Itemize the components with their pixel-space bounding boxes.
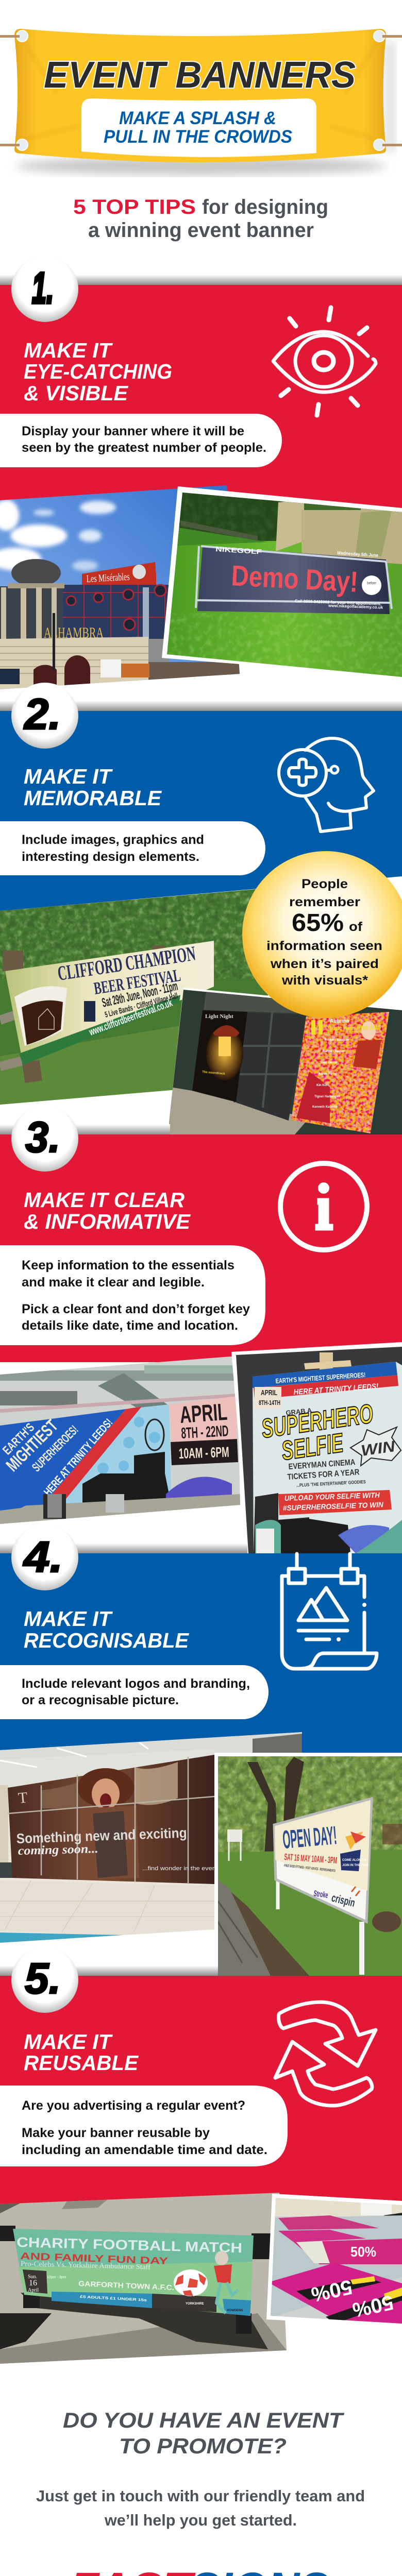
section 5 background [0, 1965, 402, 2205]
section 3 text pill: Keep information to the essentials [22, 1258, 234, 1273]
section 2 text pill: Include images, graphics and [22, 833, 204, 847]
section 1 heading: EYE-CATCHING [24, 360, 172, 383]
closing question [63, 2408, 345, 2458]
section 5 heading [24, 2030, 139, 2075]
photo: superhero selfie board: GRAB A [286, 1406, 312, 1417]
photo: Open Day banner [214, 1753, 402, 1976]
photo: Light Night posters: Aaron Parks [319, 1073, 337, 1076]
step badge 4 [11, 1524, 78, 1590]
section 5 heading: REUSABLE [24, 2051, 139, 2075]
photo: Demo Day banner: Call 0800 2425002 for your free appointment. [295, 599, 381, 606]
photo: Demo Day banner: www.nikegolfacademy.co.uk [328, 603, 383, 610]
photo: Open Day banner: COME ALONG & [342, 1859, 367, 1862]
section 3 text pill: Pick a clear font and don’t forget key [22, 1302, 250, 1316]
closing text: we’ll help you get started. [104, 2511, 297, 2529]
callout: 65% statistic: 65% [292, 909, 344, 937]
photo: superhero selfie board [231, 1342, 402, 1556]
step badge 5: 5. [25, 1954, 61, 2003]
section 3 text pill: and make it clear and legible. [22, 1275, 205, 1290]
photo: Clifford beer festival banner: Sat 29th June, Noon - 11pm [100, 979, 179, 1010]
section 5 text pill [0, 2086, 288, 2166]
photo: Trinity Leeds shopfront wrap: T [18, 1789, 28, 1807]
section 1 heading [24, 338, 172, 405]
photo: charity football match banner: 12pm - 3pm [47, 2276, 66, 2279]
photo: Light Night posters: Music Highlights 2015 [328, 1024, 381, 1032]
photo: Light Night posters: Kenneth Kaunda [312, 1106, 337, 1109]
photo: Clifford beer festival banner: 5 Live Bands · Clifford Village Hall [104, 992, 179, 1020]
section 3 heading [24, 1188, 191, 1233]
step badge 2: 2. [23, 690, 61, 738]
photo: superhero selfie board: EVERYMAN CINEMA [288, 1458, 356, 1471]
photo: Clifford beer festival banner [0, 886, 274, 1108]
closing question: DO YOU HAVE AN EVENT [63, 2408, 345, 2432]
hero subtitle panel: PULL IN THE CROWDS [104, 127, 292, 147]
section 1 text pill [0, 414, 282, 467]
photo: charity football match banner: April [28, 2287, 39, 2293]
closing text: Just get in touch with our friendly team and [36, 2487, 365, 2505]
photo: superhero selfie board: APRIL [261, 1388, 277, 1397]
photo: Trinity Leeds superhero banner: 8TH - 22ND [181, 1422, 229, 1442]
section 1 background [0, 275, 402, 510]
section 5 text pill: including an amendable time and date. [22, 2143, 267, 2157]
photo: Trinity Leeds shopfront wrap [0, 1728, 304, 1945]
section 2 background [0, 701, 402, 911]
photo: charity football match banner: HOWDENS [227, 2309, 243, 2312]
closing question: TO PROMOTE? [119, 2434, 287, 2458]
photo: Trinity Leeds superhero banner [0, 1355, 242, 1525]
section 5 text pill: Are you advertising a regular event? [22, 2098, 245, 2113]
section 4 background [0, 1543, 402, 1753]
section 3 heading: MAKE IT CLEAR [24, 1188, 185, 1212]
section 1 text pill: seen by the greatest number of people. [22, 440, 266, 455]
photo: superhero selfie board: UPLOAD YOUR SELFIE WITH [284, 1491, 380, 1502]
photo: Light Night posters: Autumn [330, 1019, 349, 1024]
step badge 4: 4. [23, 1533, 63, 1581]
icon: information [280, 1163, 367, 1250]
photo: charity football match banner: AND FAMILY FUN DAY [20, 2251, 169, 2267]
hero banner [0, 29, 402, 175]
photo: charity football match banner: GARFORTH TOWN A.F.C. [78, 2279, 174, 2292]
section 4 heading: RECOGNISABLE [24, 1629, 190, 1652]
closing text [36, 2487, 365, 2529]
photo: Trinity Leeds superhero banner: HERE AT TRINITY LEEDS! [41, 1416, 115, 1498]
photo: charity football match banner: Sun. [28, 2274, 37, 2280]
icon: hanging banner scroll [282, 1554, 377, 1669]
section 2 text pill [0, 821, 265, 875]
hero subtitle panel [81, 98, 316, 157]
photo: superhero selfie board: EARTH'S MIGHTIEST SUPERHEROES! [275, 1371, 366, 1385]
hero subtitle panel: MAKE A SPLASH & [119, 108, 276, 128]
section 2 heading [24, 765, 162, 810]
callout: 65% statistic: remember [289, 895, 360, 909]
callout: 65% statistic: when it’s paired [270, 957, 379, 971]
photo: Alhambra theatre: Les Misérables [86, 571, 130, 585]
photo: printed sale banners [266, 2194, 402, 2327]
photo: Trinity Leeds superhero banner: APRIL [179, 1398, 228, 1428]
photo: Light Night posters: Sala Zaluar [321, 1061, 338, 1064]
photo: Trinity Leeds superhero banner: EARTH'S [0, 1420, 37, 1458]
callout: 65% statistic: information seen [266, 939, 382, 953]
section 3 background [0, 1124, 402, 1362]
intro heading: 5 TOP TIPS [73, 196, 196, 218]
callout: 65% statistic: with visuals* [281, 973, 368, 988]
intro heading: a winning event banner [88, 219, 314, 242]
section 1 heading: & VISIBLE [24, 381, 129, 405]
photo: Light Night posters: The soundtrack [202, 1071, 226, 1076]
photo: Open Day banner: SAT 16 MAY 10AM - 3PM [284, 1852, 338, 1866]
photo: Open Day banner: crispin [330, 1891, 356, 1909]
icon: reuse arrows [275, 2002, 376, 2106]
section 3 text pill [0, 1245, 265, 1345]
section 4 text pill: or a recognisable picture. [22, 1693, 179, 1707]
step badge 3 [11, 1106, 78, 1172]
step badge 3: 3. [25, 1113, 60, 1161]
step badge 5 [11, 1947, 78, 2013]
photo: superhero selfie board: 8TH-14TH [259, 1399, 280, 1406]
photo: Clifford beer festival banner: BEER FESTIVAL [92, 966, 182, 998]
photo: superhero selfie board: WIN [360, 1438, 397, 1460]
photo: Trinity Leeds shopfront wrap: ...find wonder in the ever [142, 1866, 214, 1872]
photo: Trinity Leeds superhero banner: 10AM - 6PM [178, 1444, 229, 1462]
callout: 65% statistic [242, 851, 402, 1018]
icon: head with plus [279, 738, 374, 832]
photo: Demo Day banner: before [367, 582, 376, 585]
photo: superhero selfie board: #SUPERHEROSELFIE TO WIN [283, 1500, 384, 1512]
photo: charity football match banner: £5 ADULTS £1 UNDER 15s [80, 2295, 147, 2302]
icon: eye [273, 308, 376, 415]
intro heading: for designing [202, 196, 328, 218]
callout: 65% statistic: of [349, 920, 363, 934]
step badge 1: 1. [32, 264, 54, 312]
photo: Light Night posters: Bartók Quartet [323, 1050, 344, 1053]
photo: Alhambra theatre: ALHAMBRA [44, 624, 104, 641]
photo: superhero selfie board: SELFIE [280, 1428, 345, 1466]
photo: Alhambra theatre [0, 482, 242, 693]
section 1 text pill: Display your banner where it will be [22, 424, 244, 438]
step badge 2 [11, 683, 78, 749]
photo: printed sale banners: 50% [350, 2244, 376, 2260]
photo: charity football match banner: YORKSHIRE [186, 2302, 204, 2306]
section 1 heading: MAKE IT [24, 338, 113, 362]
photo: superhero selfie board: HERE AT TRINITY LEEDS! [293, 1382, 379, 1397]
photo: Demo Day banner: Wednesday 5th June [337, 550, 378, 558]
photo: Open Day banner: Stroke [313, 1889, 329, 1900]
section 4 text pill: Include relevant logos and branding, [22, 1676, 250, 1691]
photo: Open Day banner: JOIN IN THE FUN! [342, 1864, 368, 1867]
photo: Trinity Leeds superhero banner: SUPERHEROES! [29, 1423, 81, 1475]
photo: printed sale banners: 50% [350, 2291, 395, 2321]
photo: printed sale banners: 50% [309, 2275, 354, 2306]
section 4 text pill [0, 1665, 269, 1719]
section 5 text pill: Make your banner reusable by [22, 2126, 210, 2140]
photo: charity football match banner [0, 2190, 289, 2365]
section 5 heading: MAKE IT [24, 2030, 113, 2054]
photo: Trinity Leeds superhero banner: MIGHTIEST [3, 1416, 62, 1476]
section 2 heading: MAKE IT [24, 765, 113, 788]
photo: Trinity Leeds shopfront wrap: coming soon... [18, 1842, 98, 1858]
photo: Light Night posters: Richard Dawson [325, 1039, 349, 1042]
photo: Clifford beer festival banner: CLIFFORD CHAMPION [56, 941, 197, 985]
section 3 text pill: details like date, time and location. [22, 1318, 238, 1333]
section 3 heading: & INFORMATIVE [24, 1210, 191, 1233]
photo: superhero selfie board: TICKETS FOR A YEAR [287, 1468, 360, 1482]
photo: superhero selfie board: ...PLUS 'THE ENTERTAINER' GOODIES [296, 1479, 366, 1488]
photo: charity football match banner: 16 [29, 2279, 37, 2287]
section 4 heading [24, 1607, 190, 1652]
photo: Demo Day banner [160, 486, 402, 680]
photo: charity football match banner: CHARITY FOOTBALL MATCH [16, 2234, 242, 2256]
photo: Demo Day banner: Demo Day! [230, 559, 359, 598]
photo: Light Night posters: Tigran Hamasyan [314, 1095, 340, 1098]
section 2 heading: MEMORABLE [24, 786, 162, 810]
photo: Demo Day banner: NIKEGOLF [215, 545, 262, 555]
photo: Light Night posters: Kin Kin [316, 1084, 327, 1087]
section 2 text pill: interesting design elements. [22, 850, 199, 864]
intro heading [73, 196, 328, 242]
step badge 1 [11, 256, 78, 322]
photo: Trinity Leeds shopfront wrap: Something new and exciting [16, 1825, 187, 1846]
photo: Clifford beer festival banner: www.cliffordbeerfestival.co.uk [88, 997, 174, 1038]
FASTSIGNS logo [70, 2563, 332, 2576]
photo: charity football match banner: Pro-Celebs Vs. Yorkshire Ambulance Staff [21, 2260, 151, 2272]
callout: 65% statistic: People [301, 877, 348, 891]
photo: Light Night posters: Light Night [205, 1013, 233, 1020]
photo: Light Night posters [165, 987, 402, 1139]
section 4 heading: MAKE IT [24, 1607, 113, 1631]
hero title: EVENT BANNERS [44, 55, 356, 96]
photo: Open Day banner: FREE SHOE FITTINGS - FOOT ADVICE - REFRESHMENTS [284, 1864, 336, 1873]
